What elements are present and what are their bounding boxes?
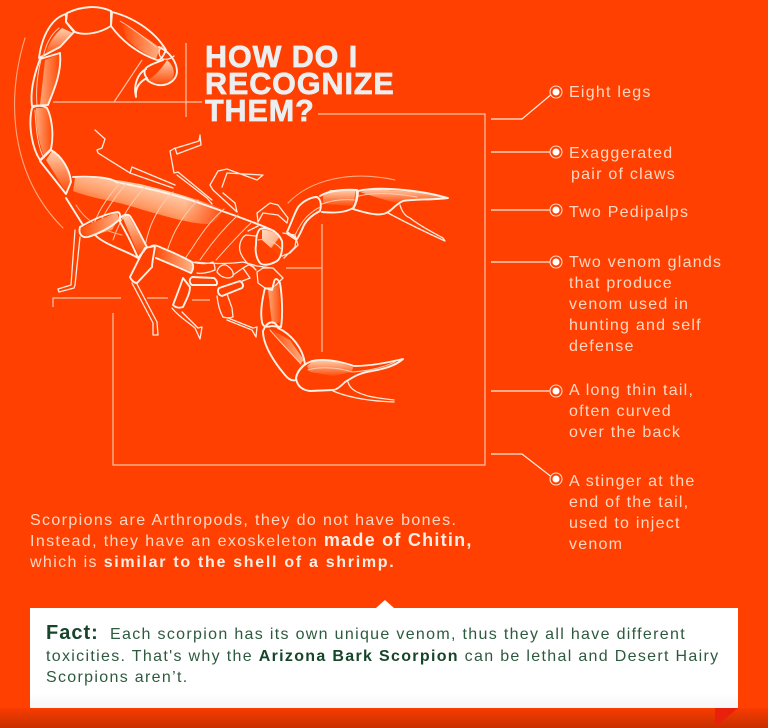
callout: stinger: used to inject	[569, 515, 681, 532]
card pointer	[376, 600, 394, 608]
callout: pedipalps: Two Pedipalps	[569, 204, 689, 221]
callout: venom glands: defense	[569, 338, 635, 355]
scorpion illustration	[30, 7, 448, 402]
fact text: Scorpions aren’t.	[46, 669, 189, 686]
heading: HOW DO I	[205, 40, 358, 74]
callout: tail	[550, 382, 694, 441]
fact text: Fact:	[46, 622, 99, 644]
paragraph: exoskeleton: Instead, they have an exoskeleton made of Chitin,	[30, 530, 473, 550]
callout: stinger	[550, 473, 696, 553]
card panel	[30, 608, 738, 708]
rear legs, upper side	[95, 130, 175, 188]
connector lines	[491, 93, 553, 478]
paragraph: exoskeleton: Scorpions are Arthropods, they do not have bones.	[30, 512, 457, 529]
callout: tail: A long thin tail,	[569, 382, 694, 399]
stinger	[148, 60, 174, 84]
near legs with shaded femurs	[81, 212, 119, 237]
callout: stinger: venom	[569, 536, 623, 553]
scorpion body	[66, 177, 298, 288]
callout: venom glands: hunting and self	[569, 317, 702, 334]
heading	[205, 40, 395, 128]
callout: venom glands: venom used in	[569, 296, 689, 313]
callout: stinger: end of the tail,	[569, 494, 689, 511]
callout: eight legs: Eight legs	[569, 84, 652, 101]
heading: THEM?	[205, 94, 315, 128]
fact text: Each scorpion has its own unique venom, thus they all have different	[110, 626, 686, 643]
callout: stinger: A stinger at the	[569, 473, 696, 490]
callout: claws: pair of claws	[571, 166, 676, 183]
card fold	[715, 708, 738, 727]
callout: tail: over the back	[569, 424, 681, 441]
paragraph: exoskeleton: which is similar to the shell of a shrimp.	[29, 554, 395, 571]
callout: claws	[550, 145, 676, 183]
scorpion upper claw	[284, 189, 448, 258]
venom gland	[262, 230, 282, 256]
head and pedipalp bases	[257, 203, 288, 223]
fact text	[46, 622, 720, 686]
callout: venom glands	[550, 254, 722, 355]
scorpion legs	[58, 130, 263, 339]
guide lines and frame	[15, 38, 485, 465]
scorpion lower claw	[261, 279, 403, 402]
fact text: toxicities. That's why the Arizona Bark Scorpion can be lethal and Desert Hairy	[46, 648, 720, 665]
callout: venom glands: Two venom glands	[569, 254, 722, 271]
callout: venom glands: that produce	[569, 275, 673, 292]
fact card	[30, 600, 738, 727]
heading: RECOGNIZE	[205, 67, 395, 101]
callout: claws: Exaggerated	[569, 145, 673, 162]
callout: tail: often curved	[569, 403, 672, 420]
paragraph: exoskeleton	[29, 512, 473, 571]
scorpion tail	[30, 7, 177, 194]
bottom shadow band	[0, 708, 768, 728]
